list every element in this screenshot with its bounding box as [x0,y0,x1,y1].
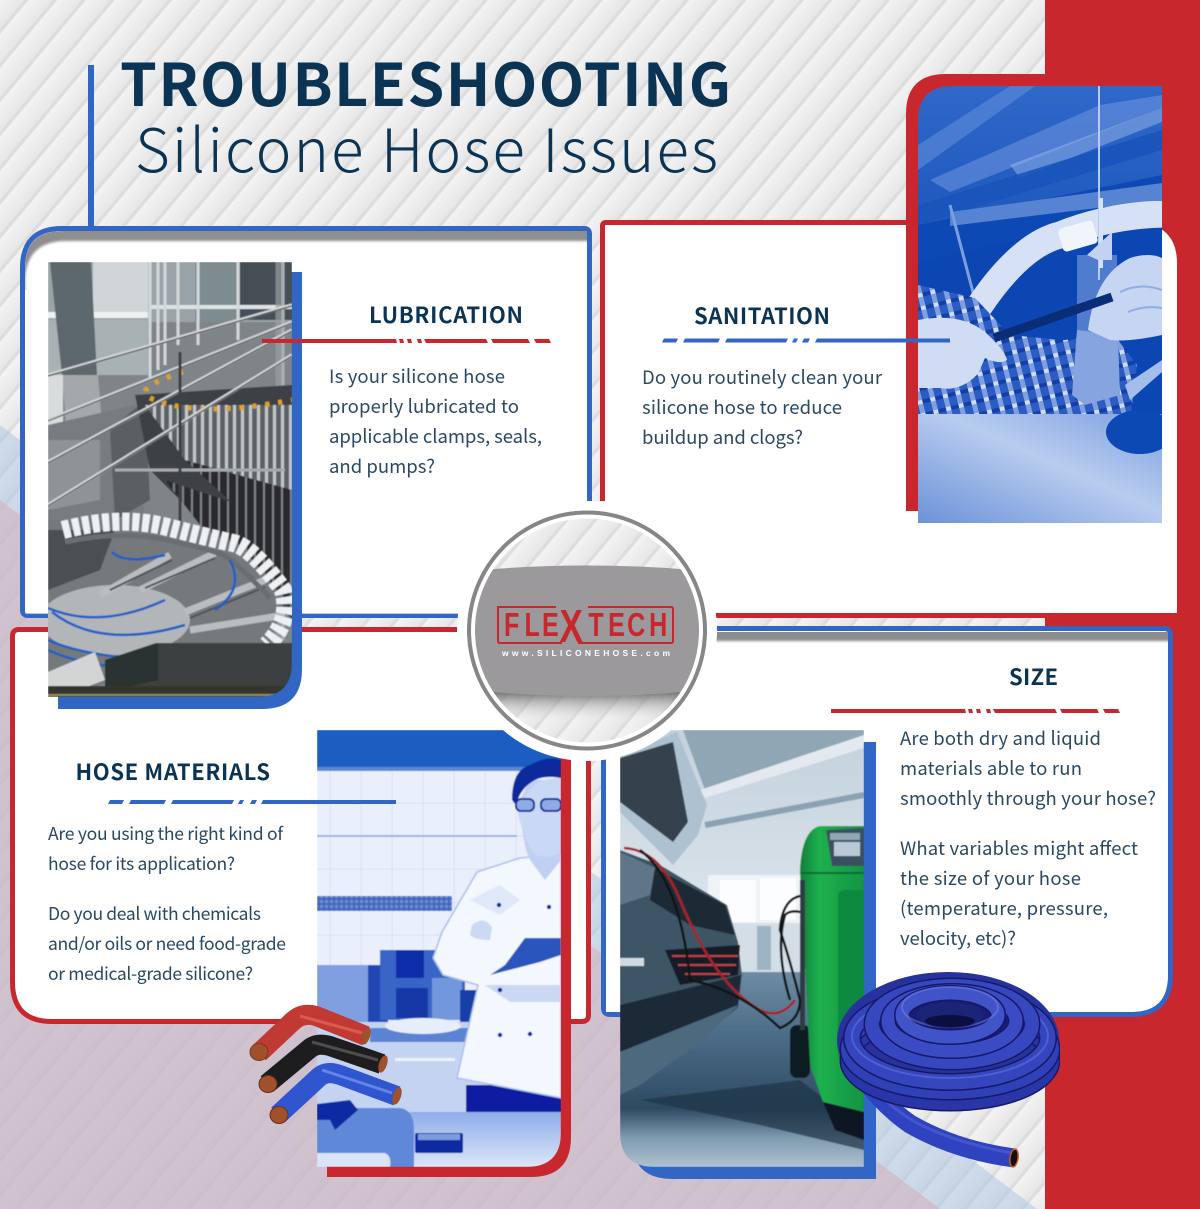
divider: hose materials [108,800,396,804]
text: size [900,725,1156,951]
text: lubrication: applicable clamps, seals, [329,423,542,449]
photo: chef in a kitchen [317,730,561,1167]
heading: lubrication: LUBRICATION [369,298,523,330]
background: pale blue wedge [0,425,1037,1209]
text: hose materials [48,821,286,986]
logo: Flextech: www.SILICONEHOSE.com [501,648,670,658]
text: size: Are both dry and liquid [900,725,1101,751]
text: size: velocity, etc)? [900,925,1016,951]
text: hose materials: and/or oils or need food-grade [48,931,286,956]
text: size: What variables might affect [900,835,1138,861]
text: sanitation: buildup and clogs? [642,424,803,450]
panel: sanitation [600,222,1200,618]
panel: size [596,628,1186,1021]
product: silicone elbow hoses [250,1015,404,1124]
photo frame: sanitation [906,74,1162,511]
title accent bar [88,65,94,230]
logo: Flextech [498,600,673,658]
divider: sanitation [662,338,950,342]
logo: Flextech: X [559,600,583,652]
text: size: the size of your hose [900,865,1081,891]
logo: Flextech: FLE [504,607,559,644]
background: mauve wedge [0,500,940,1209]
text: lubrication: Is your silicone hose [329,363,505,389]
text: size: materials able to run [900,755,1082,781]
text: hose materials: or medical-grade silicone? [48,961,253,986]
heading: size: SIZE [1009,660,1058,692]
background: red side band [1045,0,1200,1209]
heading: sanitation: SANITATION [694,299,830,331]
divider: size [831,709,1120,713]
text: hose materials: hose for its application? [48,851,235,876]
photo: factory filling machine [40,262,292,697]
text: lubrication: and pumps? [329,453,435,479]
text: sanitation: Do you routinely clean your [642,364,883,390]
photo: hands holding a hose [918,86,1174,523]
elbow: blue [270,1070,404,1124]
photo frame: hose materials [327,740,571,1177]
elbow: red [250,1015,373,1060]
logo badge [457,501,717,761]
logo: Flextech: TECH [588,607,667,644]
divider: lubrication [262,339,551,343]
product: blue silicone hose coil [837,972,1059,1167]
title: TROUBLESHOOTING [120,38,731,123]
text: sanitation [642,364,883,450]
title: Silicone Hose Issues [135,103,718,190]
panel: lubrication [22,228,600,616]
text: hose materials: Do you deal with chemicals [48,901,261,926]
panel: hose materials [12,630,588,1022]
text: lubrication: properly lubricated to [329,393,519,419]
text: sanitation: silicone hose to reduce [642,394,842,420]
photo: car connected to service machine [620,730,868,1167]
text: size: smoothly through your hose? [900,785,1156,811]
elbow: black [259,1042,390,1092]
heading: hose materials: HOSE MATERIALS [76,755,270,787]
text: hose materials: Are you using the right kind of [48,821,284,846]
title [120,38,731,190]
text: size: (temperature, pressure, [900,895,1108,921]
photo frame: lubrication [58,272,302,709]
photo frame: size [632,742,876,1179]
text: lubrication [329,363,542,479]
